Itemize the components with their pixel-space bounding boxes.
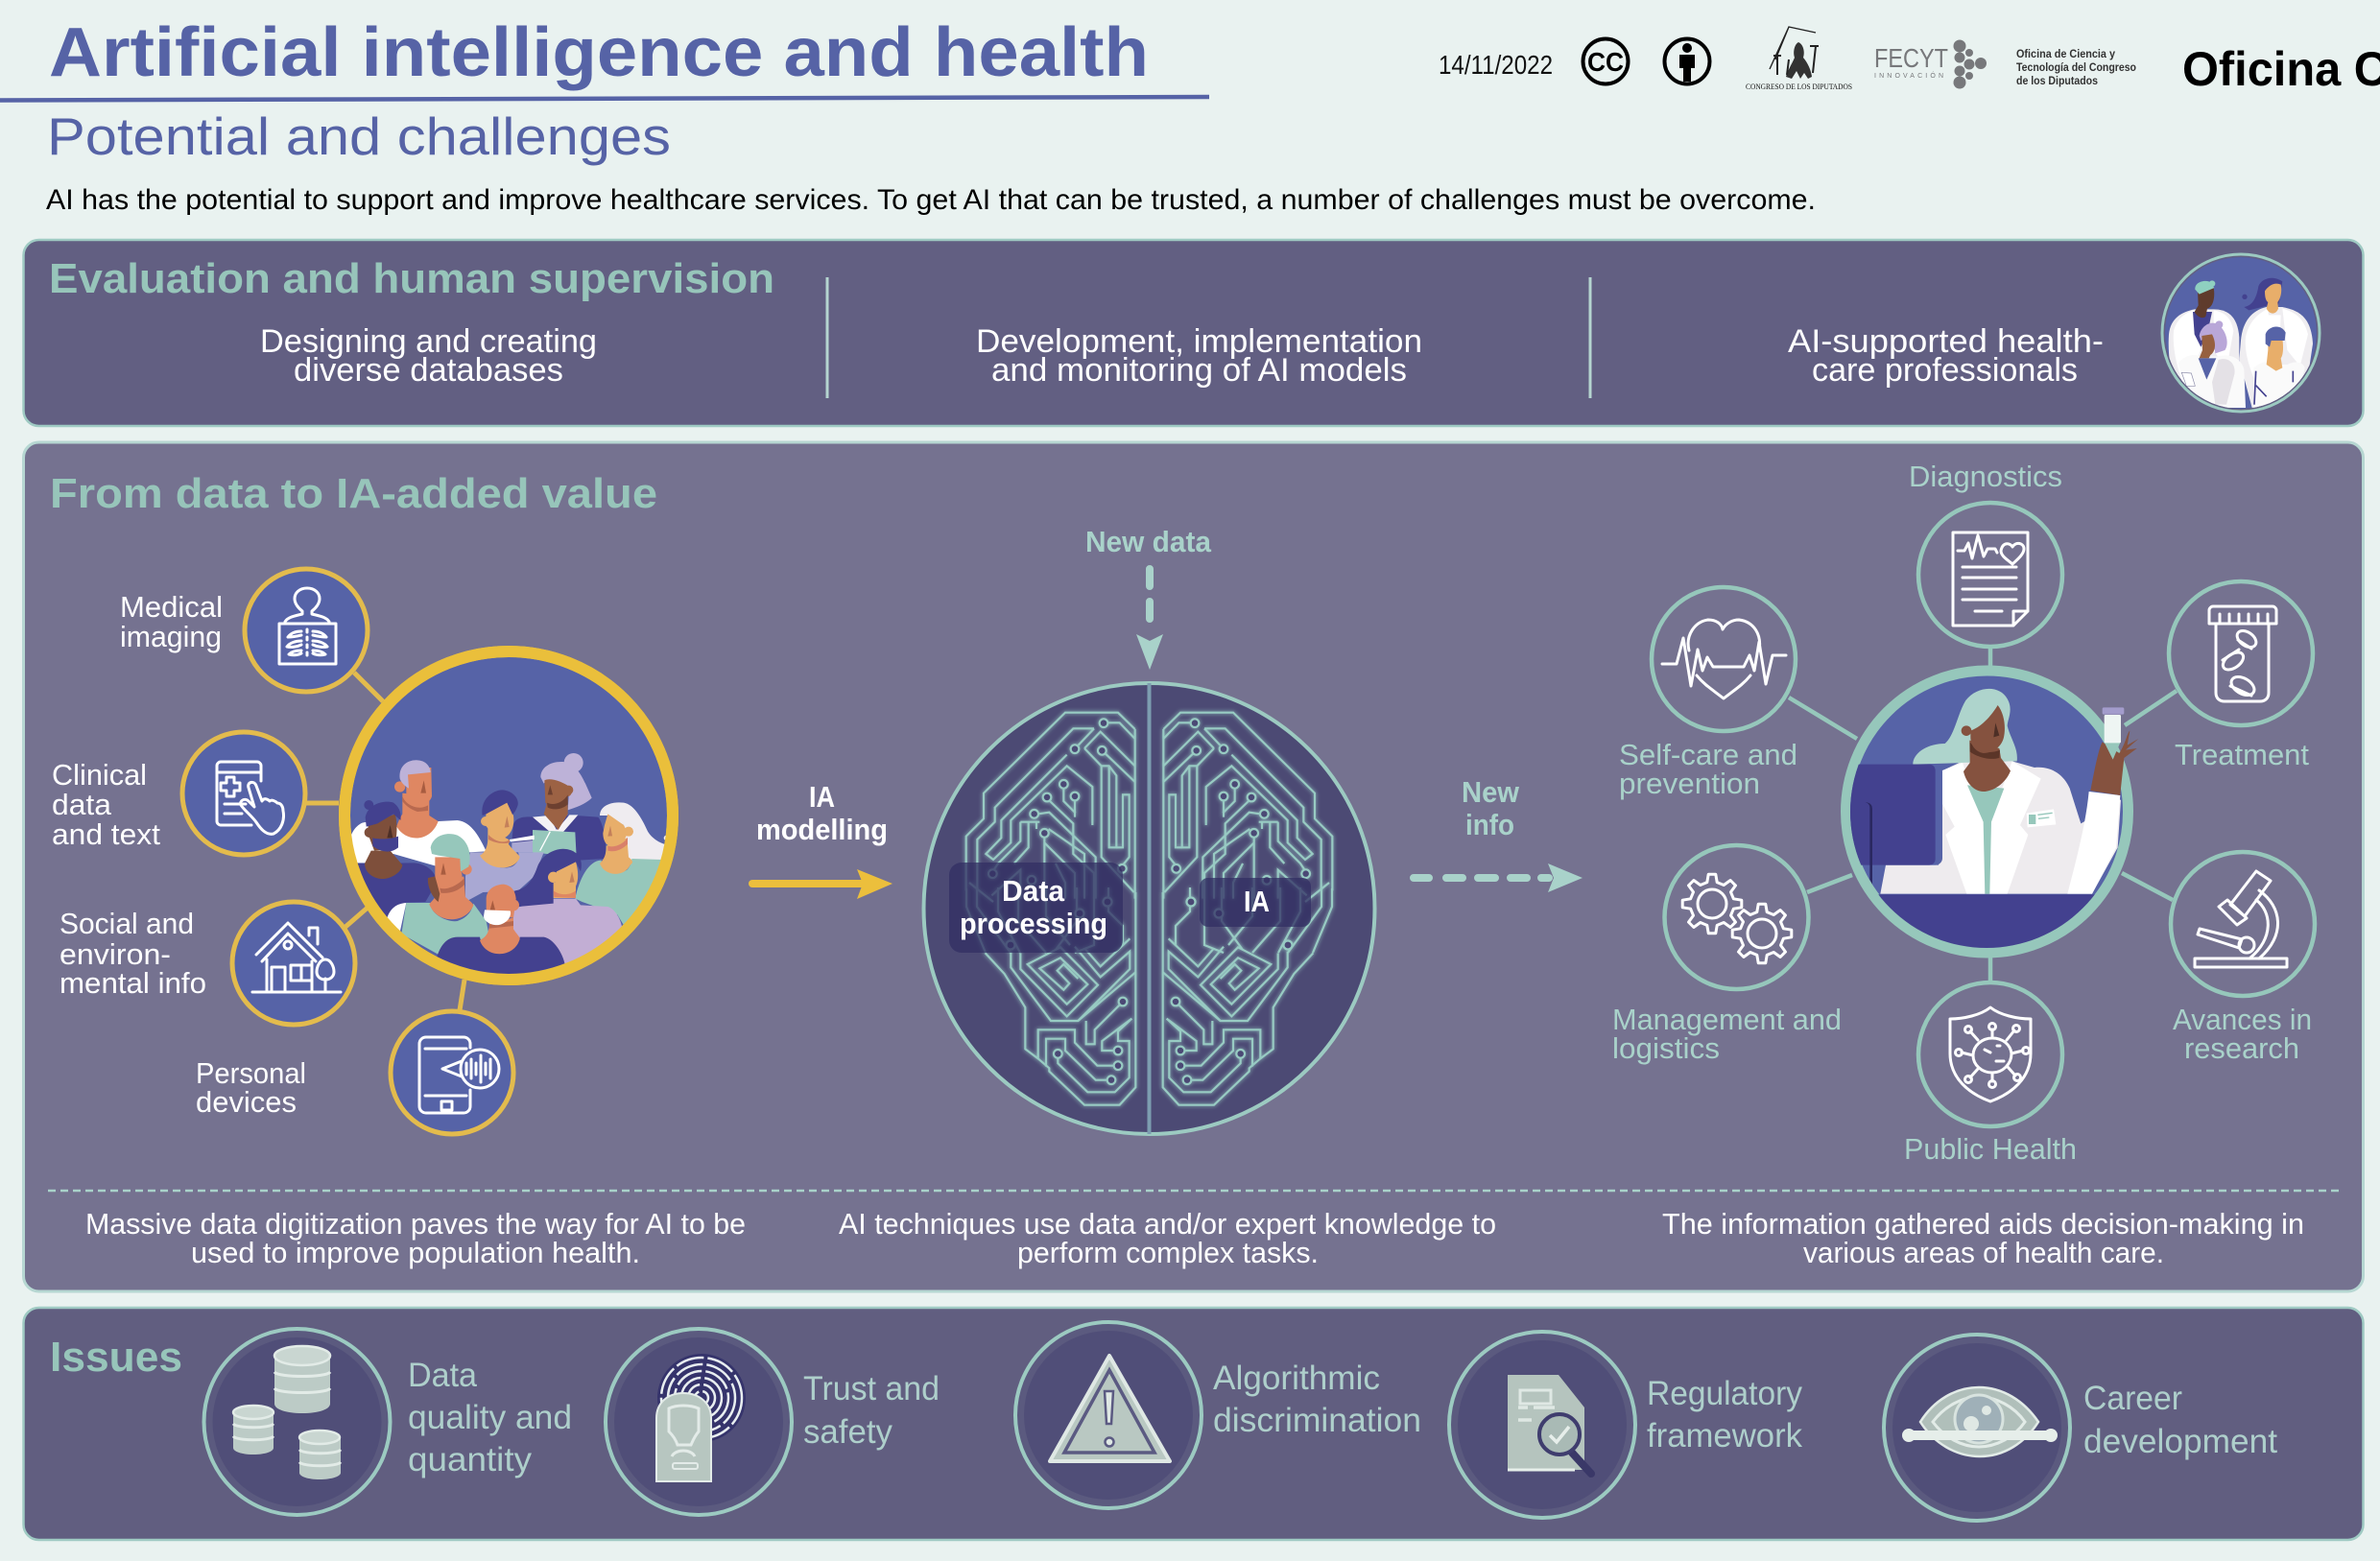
issue: career development: Career <box>2083 1380 2182 1417</box>
icon: document with magnifier <box>1449 1332 1635 1518</box>
icon: creative commons <box>1583 38 1628 84</box>
divider <box>1589 277 1591 398</box>
issue: algorithmic discrimination <box>1015 1322 1421 1508</box>
intro text: AI has the potential to support and improve healthcare services. To get AI that can be trusted, a number of challenges must be overcome. <box>46 184 1816 216</box>
application: diagnostics: Diagnostics <box>1909 460 2062 493</box>
icon: microscope <box>2171 852 2315 996</box>
label box: data processing: processing <box>960 907 1107 940</box>
logo text: Oficina de Ciencia y Tecnología <box>2016 49 2136 87</box>
issue: trust and safety <box>606 1329 940 1515</box>
data source: clinical data and text: Clinical <box>52 758 147 792</box>
issue: data quality and quantity: Data <box>408 1357 478 1394</box>
data source: clinical data and text <box>52 732 305 855</box>
data source: social and environmental info: Social and <box>60 907 194 940</box>
application: public health: Public Health <box>1904 1132 2077 1166</box>
data source: medical imaging: Medical <box>120 590 223 624</box>
header credits and logos <box>1439 27 2380 96</box>
application: public health <box>1904 982 2077 1166</box>
data source: social and environmental info: mental info <box>60 966 206 1000</box>
text: decision-making: various areas of health care. <box>1803 1236 2164 1269</box>
icon: medical report <box>1918 503 2062 647</box>
logo text: Oficina de Ciencia y Tecnología: Tecnología del Congreso <box>2016 62 2136 74</box>
woman in centre <box>465 790 544 902</box>
label: IA modelling: modelling <box>756 813 888 846</box>
icon: eye <box>1884 1335 2070 1521</box>
heading: Issues <box>50 1334 182 1381</box>
data source: personal devices <box>196 1011 513 1134</box>
application: management and logistics: logistics <box>1612 1031 1720 1065</box>
application: self-care and prevention: Self-care and <box>1619 738 1797 771</box>
issue: regulatory framework: framework <box>1647 1417 1802 1455</box>
logo: Congreso de los Diputados: CONGRESO DE LOS DIPUTADOS <box>1746 83 1852 91</box>
icon: x-ray <box>245 569 368 692</box>
man with teal hair <box>387 834 489 957</box>
text: professionals <box>1788 323 2104 389</box>
application: research: Avances in <box>2173 1003 2312 1036</box>
icon: gears <box>1664 845 1808 989</box>
application: research: research <box>2184 1031 2299 1065</box>
data source: clinical data and text: and text <box>52 817 160 851</box>
icon: pill jar <box>2169 581 2313 725</box>
label box: IA <box>1200 878 1311 927</box>
icon: creative commons: CC <box>1587 47 1624 77</box>
issue: regulatory framework <box>1449 1332 1802 1518</box>
application: diagnostics <box>1909 460 2062 647</box>
title underline <box>0 97 1209 100</box>
label: new data: New data <box>1085 525 1212 558</box>
text: data digitization: Massive data digitization paves the way for AI to be <box>85 1207 746 1241</box>
icon: attribution <box>1664 38 1710 84</box>
icon: fingerprint <box>606 1329 792 1515</box>
text: AI techniques: AI techniques use data and/or expert knowledge to <box>839 1207 1496 1241</box>
logo: FECYT: FECYT <box>1874 43 1948 73</box>
logo: Congreso de los Diputados <box>1746 27 1852 91</box>
circuit right hemisphere <box>1163 713 1332 1105</box>
icon: phone with audio <box>391 1011 513 1134</box>
woman with white hair <box>575 802 669 931</box>
arrow: new data <box>1136 569 1163 670</box>
data source: personal devices: devices <box>196 1085 297 1119</box>
issue: regulatory framework: Regulatory <box>1647 1375 1802 1412</box>
data source: social and environmental info <box>60 902 355 1025</box>
application: self-care and prevention <box>1619 587 1797 800</box>
logo: FECYT: INNOVACIÓN <box>1874 71 1943 80</box>
circuit left hemisphere <box>966 713 1135 1105</box>
label box: data processing <box>949 863 1123 953</box>
issue: trust and safety: safety <box>803 1413 892 1451</box>
issue: data quality and quantity: quantity <box>408 1441 533 1478</box>
panel: issues <box>23 1308 2363 1540</box>
application: management and logistics: Management and <box>1612 1003 1842 1036</box>
person in navy with mask <box>437 885 565 979</box>
text: models: and monitoring of AI models <box>991 352 1407 389</box>
text: decision-making <box>1662 1207 2304 1269</box>
issue: algorithmic discrimination: discrimination <box>1213 1402 1421 1439</box>
illustration: group of people <box>345 651 673 980</box>
label: new info: New <box>1462 775 1520 809</box>
data source: personal devices: Personal <box>196 1056 306 1090</box>
arrow: new info <box>1414 863 1583 892</box>
issue: algorithmic discrimination: Algorithmic <box>1213 1360 1380 1397</box>
application: self-care and prevention: prevention <box>1619 767 1760 800</box>
label box: data processing: Data <box>1002 874 1065 908</box>
label: IA modelling: IA <box>809 780 835 814</box>
panel: evaluation and human supervision <box>23 240 2363 426</box>
data source: social and environmental info: environ- <box>60 937 171 971</box>
icon: house and tree <box>232 902 355 1025</box>
text: professionals: AI-supported health- <box>1788 323 2104 360</box>
illustration: doctor <box>1840 671 2140 953</box>
text: data digitization: used to improve population health. <box>191 1236 640 1269</box>
label: new info <box>1462 775 1520 841</box>
icon: heart with pulse <box>1652 587 1796 731</box>
text: AI techniques <box>839 1207 1496 1269</box>
data source: clinical data and text: data <box>52 788 112 821</box>
issue: career development: development <box>2083 1423 2277 1460</box>
text: professionals: care professionals <box>1812 352 2078 389</box>
issue: data quality and quantity: quality and <box>408 1399 572 1436</box>
text: databases <box>260 323 597 389</box>
logo text: Oficina de Ciencia y Tecnología: Oficina de Ciencia y <box>2016 49 2116 60</box>
connectors: applications <box>1789 649 2177 981</box>
data source: medical imaging <box>120 569 368 692</box>
panel: from data to IA-added value <box>23 442 2363 1291</box>
text: models: Development, implementation <box>976 323 1422 360</box>
dashed separator <box>48 1190 2344 1192</box>
subtitle: Potential and challenges <box>47 106 671 166</box>
logo text: Oficina de Ciencia y Tecnología: de los Diputados <box>2016 76 2098 87</box>
icon: virus shield <box>1918 982 2062 1126</box>
issue: data quality and quantity <box>203 1329 572 1515</box>
label: new info: info <box>1465 808 1514 841</box>
person with face mask <box>355 800 437 918</box>
arrow: IA modelling <box>752 869 892 899</box>
connectors: data sources <box>306 673 464 1010</box>
application: management and logistics <box>1612 845 1842 1065</box>
heading: From data to IA-added value <box>50 470 657 517</box>
logo: FECYT <box>1874 40 1987 88</box>
text: databases: Designing and creating <box>260 323 597 360</box>
text: AI techniques: perform complex tasks. <box>1017 1236 1319 1269</box>
icon: warning triangle <box>1015 1322 1202 1508</box>
application: treatment <box>2169 581 2313 771</box>
text: databases: diverse databases <box>294 352 563 389</box>
application: treatment: Treatment <box>2175 738 2309 771</box>
date: 14/11/2022 <box>1439 50 1553 80</box>
man in white shirt <box>349 760 487 866</box>
illustration: healthcare team <box>2162 254 2320 412</box>
text: models <box>976 323 1422 389</box>
icon: databases <box>203 1329 390 1515</box>
heading: Evaluation and human supervision <box>49 255 774 302</box>
illustration: circuit brain <box>923 683 1374 1134</box>
application: research <box>2171 852 2315 1065</box>
issue: trust and safety: Trust and <box>803 1370 940 1407</box>
divider <box>825 277 829 398</box>
data source: medical imaging: imaging <box>120 620 222 653</box>
label box: IA: IA <box>1244 885 1270 918</box>
woman with bun <box>510 753 606 861</box>
icon: tablet with touch <box>182 732 305 855</box>
label: IA modelling <box>756 780 888 846</box>
text: decision-making: The information gathered aids decision-making in <box>1662 1207 2304 1241</box>
text: data digitization <box>85 1207 746 1269</box>
woman with long blue hair <box>513 849 622 966</box>
title: Artificial intelligence and health <box>49 14 1149 91</box>
issue: career development <box>1884 1335 2277 1521</box>
